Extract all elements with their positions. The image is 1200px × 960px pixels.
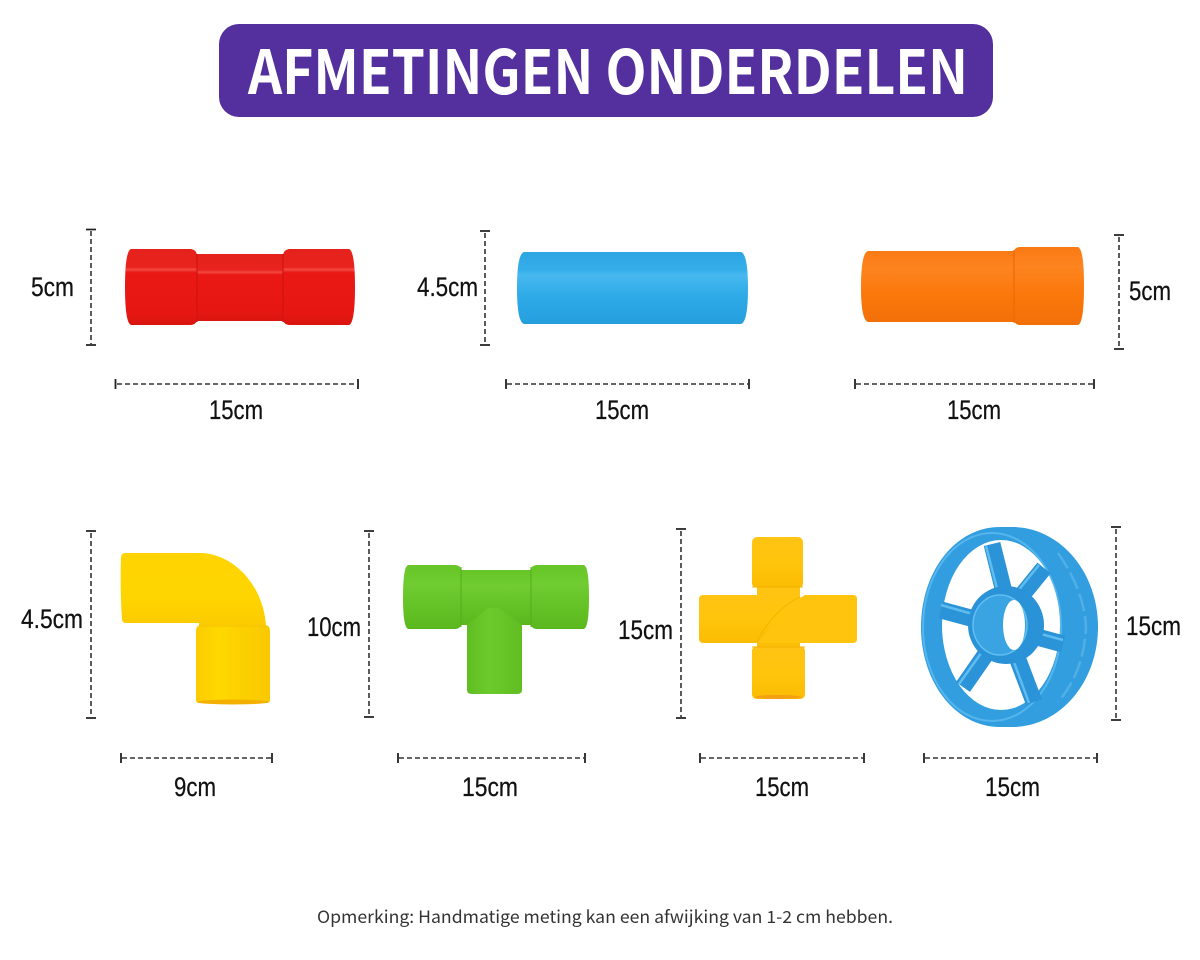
dimension: blue tube width: 15cm <box>595 395 649 425</box>
dimension: orange tube width <box>855 379 1094 425</box>
dimension: wheel height <box>1111 527 1181 720</box>
dimension: cross height: 15cm <box>618 615 673 645</box>
dimension: elbow width <box>121 753 272 802</box>
dimension: orange tube height <box>1114 235 1171 349</box>
wheel opening <box>942 540 1060 710</box>
part: blue wheel <box>921 527 1098 727</box>
dimension: blue tube height: 4.5cm <box>417 272 478 302</box>
hub <box>968 586 1044 664</box>
tyre <box>921 527 1098 727</box>
dimension: elbow height: 4.5cm <box>21 604 83 634</box>
part: blue tube <box>517 252 748 324</box>
dimension: blue tube width <box>506 379 749 425</box>
dimension: wheel height: 15cm <box>1126 611 1181 641</box>
title banner <box>219 23 993 117</box>
dimension: elbow height <box>21 531 96 718</box>
part: red tube <box>125 249 355 325</box>
rim face <box>923 533 1061 721</box>
part: yellow elbow <box>121 553 270 704</box>
dimension: cross width: 15cm <box>755 772 809 802</box>
dimension: orange tube height: 5cm <box>1129 276 1171 306</box>
dimension: wheel width: 15cm <box>985 772 1040 802</box>
dimension: red tube width: 15cm <box>209 395 263 425</box>
dimension: red tube height: 5cm <box>31 272 74 302</box>
footnote: Opmerking: Handmatige meting kan een afwijking van 1-2 cm hebben. <box>317 903 893 928</box>
dimension: orange tube width: 15cm <box>947 395 1001 425</box>
dimension: red tube width <box>116 379 358 425</box>
dimension: tee width <box>398 753 585 802</box>
part: green tee <box>403 565 589 694</box>
dimension: cross height <box>618 529 686 718</box>
dimension: red tube height <box>31 230 96 345</box>
dimension: tee height: 10cm <box>307 612 361 642</box>
spokes <box>941 544 1063 702</box>
part: yellow cross <box>699 537 857 699</box>
part: orange tube <box>861 247 1084 325</box>
dimension: elbow width: 9cm <box>174 772 216 802</box>
dimension: blue tube height <box>417 231 490 345</box>
dimension: cross width <box>700 753 864 802</box>
dimension: tee width: 15cm <box>462 772 518 802</box>
title: AFMETINGEN ONDERDELEN <box>247 23 968 112</box>
dimension: wheel width <box>924 753 1097 802</box>
dimension: tee height <box>307 531 374 717</box>
